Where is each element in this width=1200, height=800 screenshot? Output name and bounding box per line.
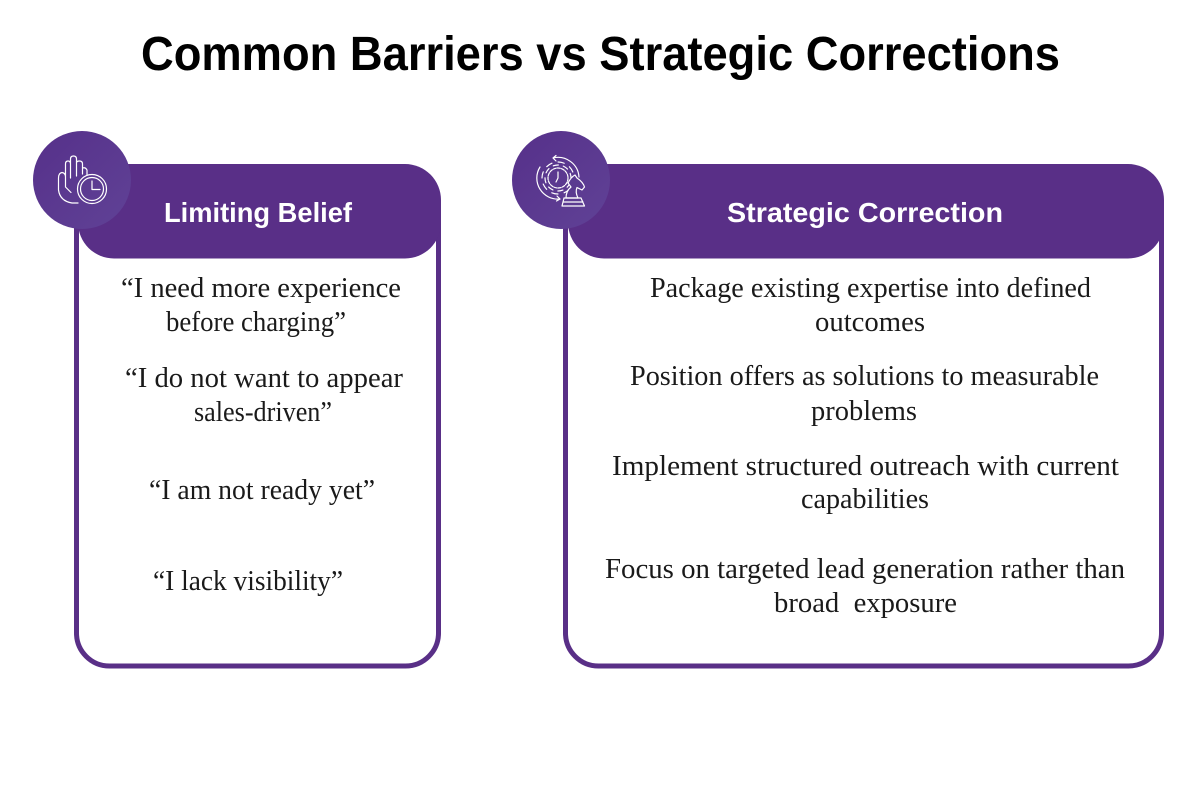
panel outline: strategic correction [566, 215, 1162, 666]
correction 4: Focus on targeted lead generation rather than [605, 554, 1125, 585]
panel: limiting belief [33, 131, 441, 666]
title: Common Barriers vs Strategic Corrections [141, 28, 1060, 81]
correction 2 [630, 361, 1099, 427]
belief 2: sales-driven” [194, 397, 332, 428]
belief 4: “I lack visibility” [153, 566, 343, 597]
correction 1 [650, 273, 1091, 338]
belief 3: “I am not ready yet” [149, 475, 375, 506]
belief 1: before charging” [166, 307, 346, 338]
belief 1 [121, 273, 401, 338]
icon badge: gear clock and chess knight [512, 131, 610, 229]
correction 4 [605, 554, 1125, 619]
panel: strategic correction [512, 131, 1164, 666]
belief 2 [125, 363, 404, 428]
panel outline: limiting belief [76, 215, 438, 666]
header text: strategic correction: Strategic Correction [727, 197, 1003, 228]
correction 2: problems [811, 396, 917, 427]
correction 4: broad exposure [774, 588, 957, 619]
header text: limiting belief: Limiting Belief [164, 197, 353, 228]
correction 3: capabilities [801, 484, 929, 515]
header band: strategic correction [568, 164, 1164, 258]
correction 1: Package existing expertise into defined [650, 273, 1091, 304]
belief 1: “I need more experience [121, 273, 401, 304]
correction 3 [612, 451, 1119, 515]
belief 2: “I do not want to appear [125, 363, 404, 394]
icon badge: hand and clock [33, 131, 131, 229]
header band: limiting belief [78, 164, 441, 258]
correction 2: Position offers as solutions to measurable [630, 361, 1099, 392]
correction 3: Implement structured outreach with current [612, 451, 1119, 482]
correction 1: outcomes [815, 307, 925, 338]
